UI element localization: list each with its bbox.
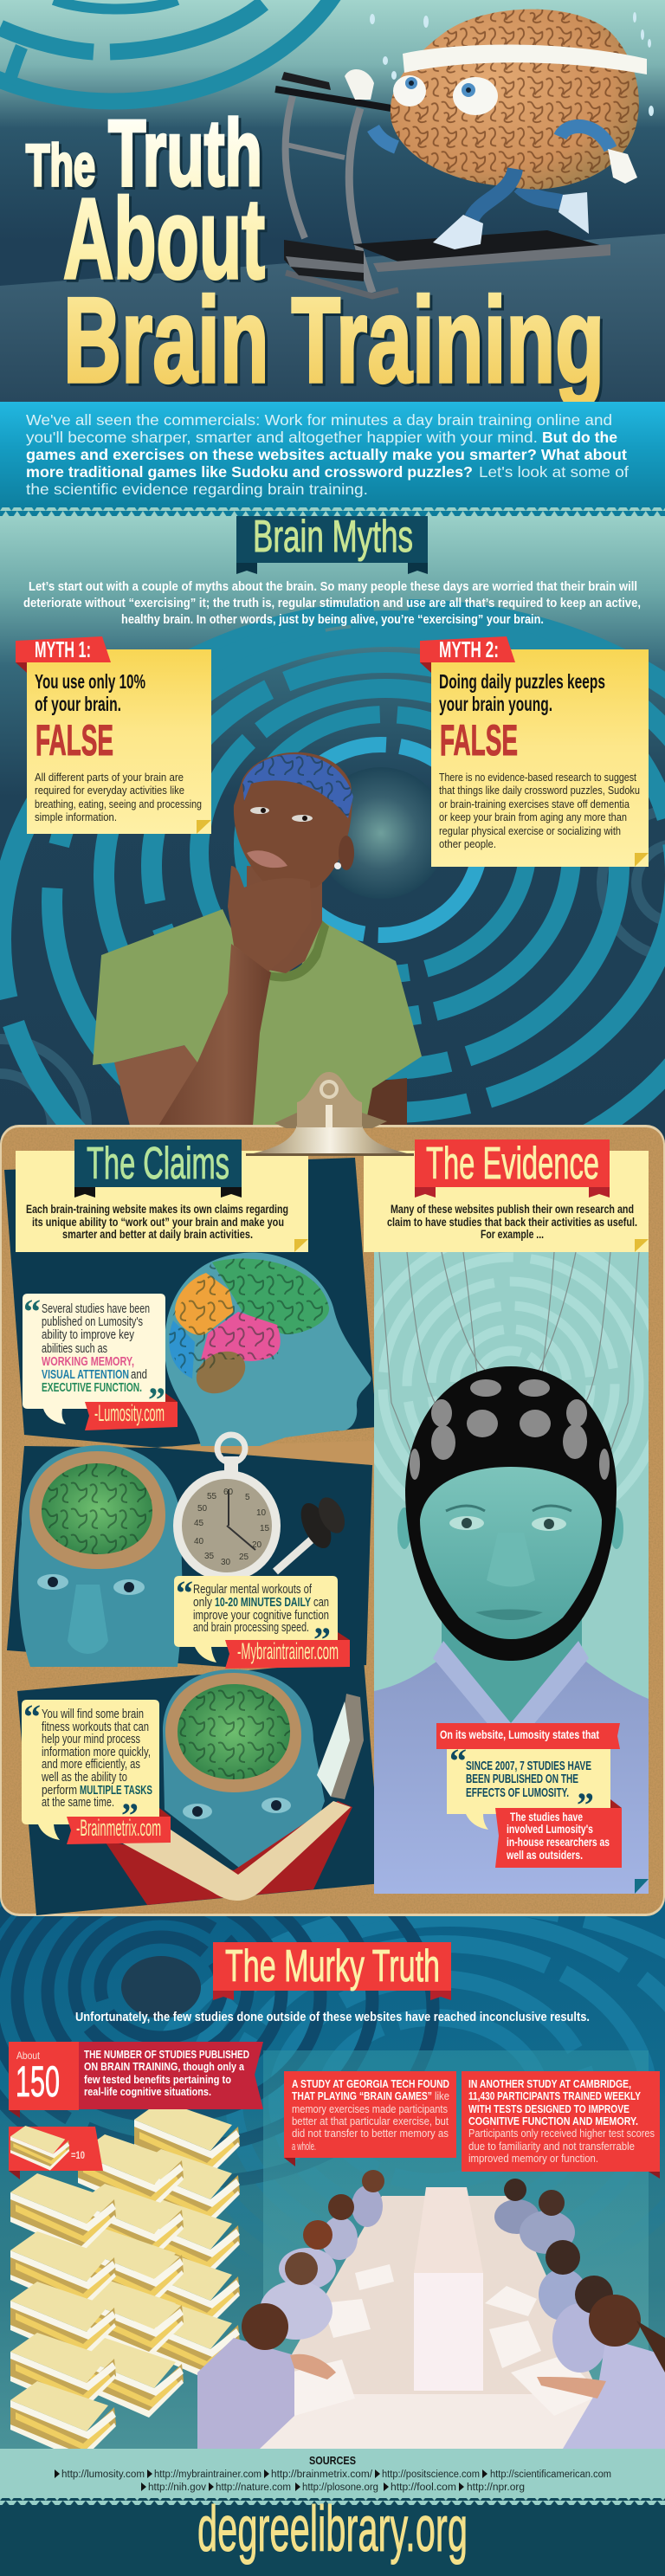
- stat text: THE NUMBER OF STUDIES PUBLISHED: [84, 2048, 249, 2061]
- quote: Brainmetrix: You will find some brain: [42, 1707, 144, 1721]
- far arm: [365, 1078, 407, 1126]
- myth 1 body: [35, 771, 202, 823]
- quote: Brainmetrix: information more quickly,: [42, 1745, 151, 1759]
- clip plate: [246, 1126, 414, 1155]
- myth 1 body: breathing, eating, seeing and processing: [35, 797, 202, 810]
- electrode wires: [379, 1252, 639, 1463]
- quote: seven studies: SINCE 2007, 7 STUDIES HAVE: [466, 1759, 591, 1773]
- title: About: [63, 175, 265, 302]
- cork wedge: [157, 1441, 374, 1465]
- section background: murky truth: [0, 1836, 665, 2449]
- quote: Brainmetrix: fitness workouts that can: [42, 1720, 149, 1734]
- myths intro text: healthy brain. In other words, just by being alive, you’re “exercising” your brain.: [121, 612, 544, 627]
- source links: http://scientificamerican.com: [490, 2469, 611, 2480]
- source tag: -Lumosity.com: [94, 1400, 165, 1426]
- figure: thinking man: [93, 752, 422, 1126]
- central orb: [315, 767, 447, 899]
- quote: Brainmetrix: well as the ability to: [41, 1770, 127, 1785]
- electrodes: [410, 1379, 610, 1480]
- quote: Mybraintrainer: only: [193, 1595, 212, 1610]
- quote: Brainmetrix: “: [23, 1697, 41, 1736]
- callout: in-house researchers: well as outsiders.: [506, 1849, 583, 1862]
- quote: Brainmetrix: help your mind process: [42, 1732, 140, 1746]
- source tag: -Brainmetrix.com: [76, 1815, 161, 1841]
- back leg: [520, 186, 567, 204]
- intro text: Let's look at some of: [479, 463, 629, 481]
- source links: http://nih.gov: [148, 2482, 206, 2493]
- quote: seven studies: “: [449, 1741, 467, 1780]
- myth 1 body: required for everyday activities like: [35, 784, 184, 797]
- panel: myth 1: [16, 636, 211, 834]
- source tag: [225, 1632, 350, 1669]
- black cap: [405, 1366, 617, 1661]
- source links: http://fool.com: [391, 2482, 456, 2493]
- head: [234, 752, 352, 892]
- evidence text: For example ...: [481, 1227, 544, 1241]
- intro text: games and exercises on these websites actually make you smarter? What about: [26, 446, 627, 463]
- legend: one stack equals ten: [9, 2126, 103, 2179]
- footer: [0, 2493, 665, 2576]
- hand: [228, 866, 312, 972]
- eyes: [393, 75, 498, 115]
- intro text: more traditional games like Sudoku and crossword puzzles?: [26, 463, 473, 481]
- source tag: [67, 1808, 171, 1844]
- callout: Georgia Tech: like: [435, 2089, 449, 2102]
- Lumosity evidence callouts: [436, 1723, 622, 1868]
- panel: myth 1: of your brain.: [35, 693, 121, 715]
- stat text: ON BRAIN TRAINING, though only a: [84, 2060, 245, 2073]
- clip wings: [274, 1113, 387, 1128]
- quote: Lumosity: ”: [148, 1380, 165, 1419]
- stat text: few tested benefits pertaining to: [84, 2073, 231, 2086]
- quote: Lumosity: VISUAL ATTENTION: [42, 1367, 129, 1382]
- callout: Georgia Tech: better at that particular exercise, but: [292, 2114, 449, 2127]
- brain body: [391, 10, 639, 190]
- quote: Mybraintrainer: “: [176, 1573, 193, 1612]
- myth 2 body: or keep your brain from aging any more than: [439, 810, 627, 823]
- intro text: the scientific evidence regarding brain training.: [26, 481, 368, 498]
- shirt: [93, 909, 422, 1126]
- murky maze: [0, 1836, 665, 2321]
- note: the claims: [16, 1139, 308, 1252]
- bullet markers: [55, 2469, 487, 2491]
- myth 1 label: [16, 636, 111, 673]
- panel: claims dark cards: [4, 1158, 382, 1915]
- intro text: you'll become sharper, smarter and altogether happier with your mind.: [26, 429, 538, 446]
- sources: SOURCES: [309, 2455, 356, 2467]
- myth 2 label: MYTH 2:: [439, 636, 499, 662]
- panel: myth 1: FALSE: [36, 716, 113, 765]
- title: Truth: [108, 100, 262, 206]
- book: [104, 1801, 352, 1905]
- callout: in-house researchers: involved Lumosity's: [507, 1823, 593, 1836]
- students: left row: [197, 2170, 384, 2449]
- collar: [268, 920, 329, 981]
- clip body: [297, 1072, 362, 1127]
- source links: http://npr.org: [467, 2482, 525, 2493]
- quote: Mybraintrainer: 10-20 MINUTES DAILY: [215, 1595, 311, 1610]
- neck: [442, 1611, 582, 1727]
- heading: The Claims: The Claims: [87, 1139, 229, 1189]
- quote: seven studies: ”: [577, 1785, 594, 1824]
- source links: http://mybraintrainer.com: [154, 2469, 261, 2480]
- illustration: stopwatch: [173, 1435, 281, 1581]
- stopwatch numerals: 15: [260, 1524, 270, 1533]
- stopwatch numerals: 40: [194, 1537, 204, 1546]
- stat: 150 studies: 150: [16, 2057, 60, 2106]
- source tag: -Mybraintrainer.com: [237, 1638, 339, 1664]
- footer: degreelibrary.org: [197, 2493, 468, 2565]
- claims text: Each brain-training website makes its own claims regarding: [26, 1202, 288, 1216]
- running arm and leg: [433, 126, 637, 249]
- myth 2 body: other people.: [439, 837, 496, 850]
- callout: Georgia Tech: memory exercises made participants: [292, 2102, 448, 2115]
- quote: seven studies: EFFECTS OF LUMOSITY.: [466, 1785, 569, 1800]
- section background: brain myths: [0, 516, 665, 1140]
- callout: Georgia Tech: did not transfer to better memory as: [292, 2127, 449, 2140]
- claims text: its unique ability to “work out” your brain and make you: [32, 1215, 284, 1229]
- quote: Brainmetrix: [22, 1697, 171, 1844]
- title: The: [26, 132, 95, 198]
- stopwatch numerals: 10: [256, 1508, 267, 1518]
- pale maze rings: [374, 1252, 649, 1501]
- myth 1 body: simple information.: [35, 810, 117, 823]
- phone: [331, 1694, 364, 1799]
- stat text: real-life cognitive situations.: [84, 2085, 211, 2098]
- sweat drops: [370, 12, 654, 116]
- quote: Mybraintrainer: [174, 1573, 350, 1669]
- panel: evidence: [374, 1252, 649, 1894]
- heading: The Murky Truth: The Murky Truth: [225, 1941, 440, 1992]
- source links: http://nature.com: [216, 2482, 291, 2493]
- quote: Mybraintrainer: Regular mental workouts of: [193, 1582, 313, 1597]
- chest and neck skin: [247, 866, 322, 973]
- callout: in-house researchers: The studies have: [510, 1811, 583, 1824]
- quote: Lumosity: Several studies have been: [42, 1301, 150, 1316]
- illustration: dumbbell: [275, 1494, 350, 1572]
- panel: myth 1: You use only 10%: [35, 670, 145, 693]
- brain regions: [169, 1259, 329, 1402]
- murky subtitle: Unfortunately, the few studies done outside of these websites have reached inconclusive results.: [75, 2010, 590, 2024]
- illustration: head with green brain: [18, 1445, 183, 1667]
- quote: Lumosity: “: [23, 1292, 41, 1331]
- callout: Georgia Tech: A STUDY AT GEORGIA TECH FOUND: [292, 2077, 449, 2090]
- panel: myth 2: your brain young.: [439, 693, 552, 715]
- source tag: [85, 1393, 178, 1430]
- stopwatch numerals: 55: [207, 1492, 217, 1501]
- clipboard clip: [246, 1072, 414, 1156]
- stopwatch numerals: 5: [245, 1493, 250, 1502]
- ribbon: on its website: On its website, Lumosity states that: [440, 1727, 599, 1741]
- quote: Brainmetrix: and more efficiently, as: [42, 1757, 140, 1772]
- photo: students writing at table: [197, 2170, 665, 2449]
- stopwatch numerals: [194, 1488, 270, 1567]
- ribbon: on its website: [436, 1723, 620, 1749]
- stat: 150 studies: [9, 2042, 263, 2118]
- maze background: [0, 610, 665, 1269]
- heading: Brain Myths: [236, 512, 428, 574]
- quote: Lumosity: WORKING MEMORY,: [42, 1354, 134, 1369]
- panel: myth 2: FALSE: [440, 716, 518, 765]
- myth 2 body: regular physical exercise or socializing with: [439, 824, 621, 837]
- stat: 150 studies: About: [16, 2050, 41, 2062]
- face: [420, 1467, 602, 1639]
- quote: Lumosity: abilities such as: [42, 1341, 107, 1356]
- students: right row: [494, 2179, 665, 2449]
- callout: Georgia Tech: a whole.: [292, 2140, 316, 2153]
- claims text: [26, 1202, 288, 1241]
- myth 2 body: [439, 771, 640, 850]
- sources: [0, 2449, 665, 2505]
- headband: [403, 45, 647, 74]
- ear: [339, 836, 354, 870]
- quote: Lumosity: ability to improve key: [42, 1327, 134, 1342]
- stopwatch numerals: 30: [221, 1558, 231, 1567]
- heading: The Evidence: [415, 1139, 610, 1198]
- heading: The Claims: [74, 1139, 242, 1198]
- callout: in-house researchers: in-house researchers as: [507, 1836, 610, 1849]
- forearm: [158, 944, 271, 1126]
- header background: [0, 0, 665, 402]
- intro text: We've all seen the commercials: Work for minutes a day brain training online and: [26, 411, 612, 429]
- quote: Mybraintrainer: can: [313, 1595, 329, 1610]
- folder stacks: [10, 2101, 240, 2461]
- stopwatch numerals: 25: [239, 1553, 249, 1562]
- face details: [446, 1506, 571, 1620]
- quote: Lumosity: and: [131, 1367, 147, 1382]
- illustration: head with brain and book: [104, 1669, 364, 1905]
- shirt and collar: [374, 1658, 649, 1894]
- ears: [397, 1508, 623, 1549]
- myth 1 label: MYTH 1:: [35, 636, 91, 662]
- eyes and nose: [37, 1574, 145, 1654]
- stopwatch numerals: 50: [197, 1504, 208, 1514]
- clipboard board: [0, 1125, 665, 1916]
- stopwatch numerals: 20: [252, 1540, 262, 1550]
- illustration: head with coloured brain: [165, 1253, 371, 1446]
- stopwatch numerals: 60: [223, 1488, 234, 1497]
- eyes: [183, 1798, 291, 1819]
- callout: in-house researchers: [495, 1799, 622, 1868]
- callout: Cambridge: due to familiarity and not transferrable: [468, 2140, 635, 2153]
- claims text: smarter and better at daily brain activities.: [62, 1227, 253, 1241]
- myth 1 body: All different parts of your brain are: [35, 771, 184, 784]
- quote: Mybraintrainer: ”: [313, 1620, 331, 1659]
- stopwatch numerals: 35: [204, 1552, 215, 1561]
- quote: Lumosity: [23, 1292, 178, 1430]
- callout: Cambridge: improved memory or function.: [468, 2152, 598, 2165]
- source links: http://plosone.org: [302, 2482, 378, 2493]
- myth 2 label: [420, 636, 515, 673]
- face details: [247, 807, 341, 869]
- title: [26, 100, 604, 408]
- front arm and glove: [373, 128, 397, 147]
- callout: Georgia Tech: [284, 2071, 456, 2166]
- quote: Brainmetrix: at the same time.: [42, 1795, 114, 1810]
- treadmill: [275, 72, 610, 296]
- callout: Georgia Tech: THAT PLAYING “BRAIN GAMES”: [292, 2089, 432, 2102]
- quote: Lumosity: published on Lumosity's: [42, 1314, 143, 1329]
- panel: myth 2: [420, 636, 649, 867]
- near upper arm: [114, 1045, 201, 1126]
- quote: Mybraintrainer: and brain processing speed.: [193, 1620, 309, 1635]
- intro text: But do the: [542, 429, 617, 446]
- stat text: [84, 2048, 249, 2098]
- papers: [273, 2264, 602, 2416]
- evidence text: [387, 1202, 637, 1241]
- source links: http://positscience.com: [382, 2469, 480, 2480]
- intro band: [0, 402, 665, 516]
- blue brain cap: [242, 754, 353, 818]
- quote: Lumosity: EXECUTIVE FUNCTION.: [42, 1380, 142, 1395]
- intro text: [26, 411, 629, 498]
- stopwatch numerals: 45: [194, 1519, 204, 1528]
- source links: http://lumosity.com: [61, 2469, 145, 2480]
- myths intro text: [23, 579, 641, 627]
- quote: seven studies: BEEN PUBLISHED ON THE: [466, 1772, 578, 1786]
- quote: seven studies: [447, 1741, 610, 1830]
- source links: http://brainmetrix.com/: [271, 2469, 373, 2480]
- quote: Brainmetrix: perform: [42, 1783, 77, 1798]
- heading: The Murky Truth: [213, 1941, 451, 2000]
- note: the evidence: [364, 1139, 649, 1252]
- legend: one stack equals ten: =10: [71, 2149, 85, 2161]
- myth 2 body: or brain-training exercises stave off dementia: [439, 797, 630, 810]
- heading: Brain Myths: Brain Myths: [253, 512, 413, 562]
- table: [238, 2196, 623, 2449]
- divider box: [414, 2187, 483, 2391]
- callout: Cambridge: [462, 2071, 660, 2179]
- quote: Mybraintrainer: improve your cognitive function: [193, 1608, 329, 1623]
- source links: [61, 2469, 611, 2493]
- quote: Brainmetrix: MULTIPLE TASKS: [80, 1783, 152, 1798]
- maze arcs top-left: [0, 0, 364, 101]
- illustration: brain on treadmill: [275, 10, 654, 296]
- quote: Brainmetrix: ”: [121, 1796, 139, 1835]
